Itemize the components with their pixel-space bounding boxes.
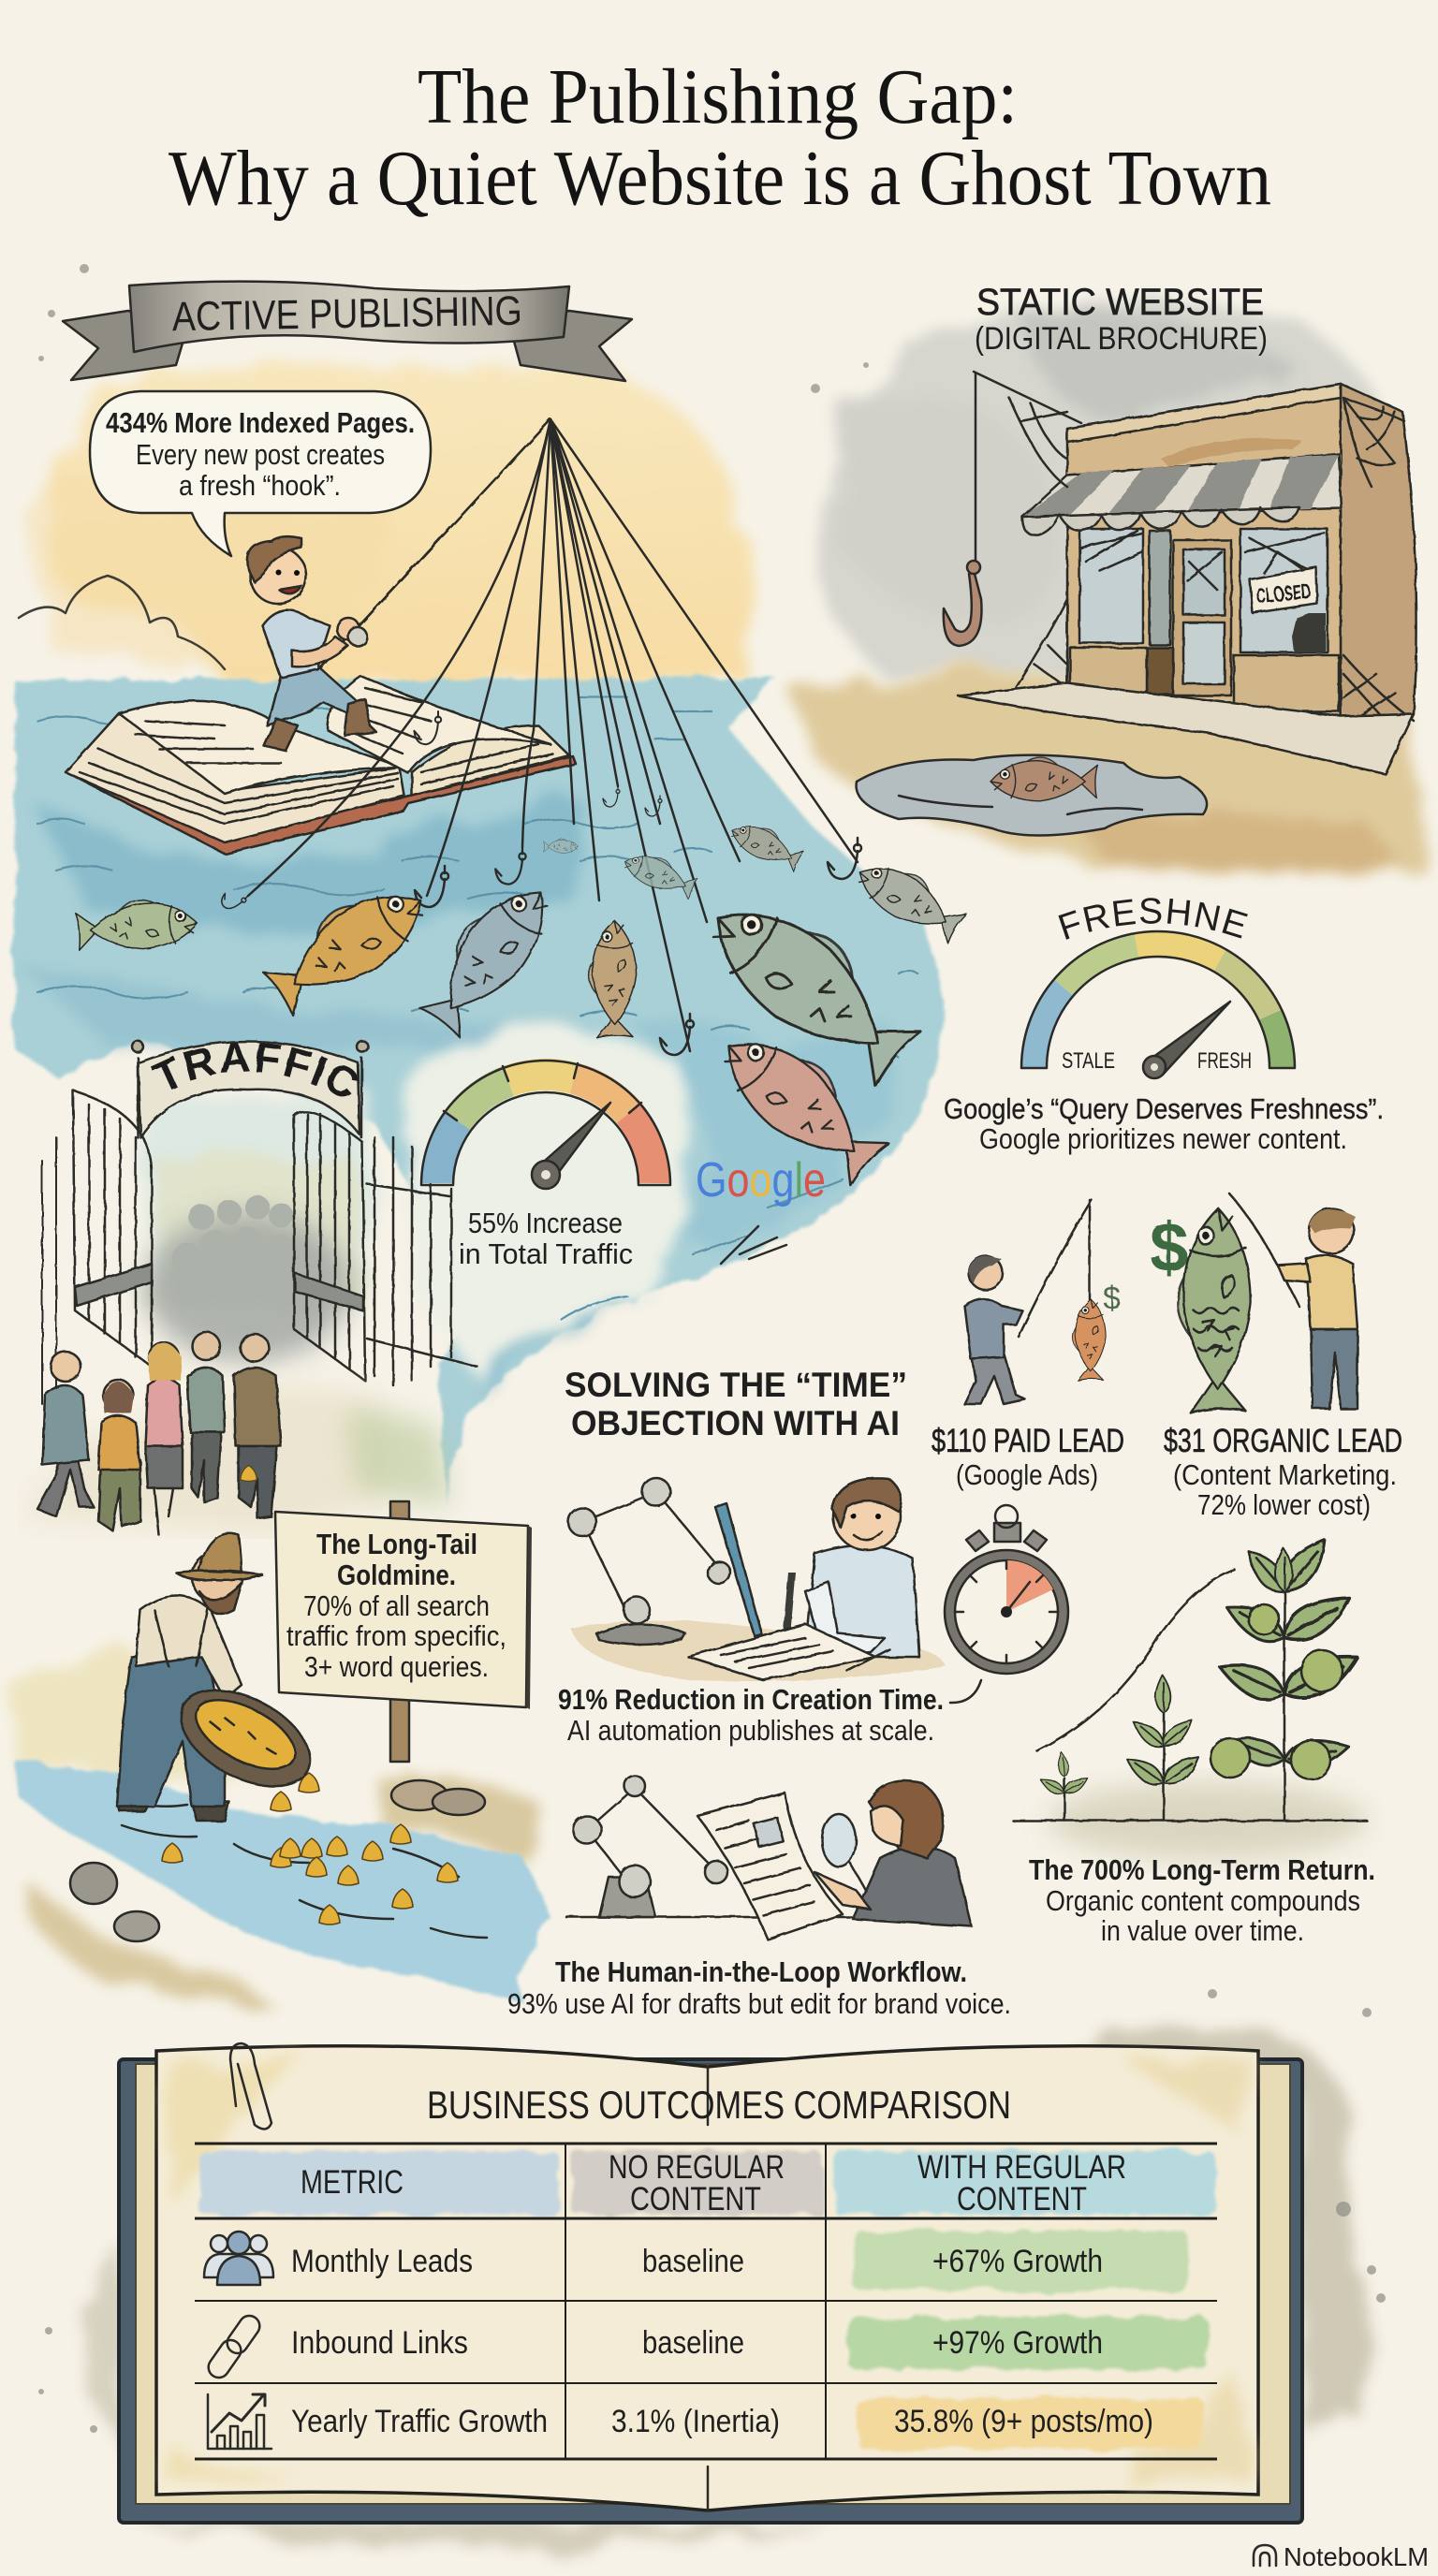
book pages bbox=[156, 2046, 1258, 2510]
icon: growth chart bbox=[208, 2394, 271, 2449]
static website heading: (DIGITAL BROCHURE) bbox=[975, 321, 1268, 357]
text: paid lead: (Google Ads) bbox=[956, 1458, 1098, 1491]
text: query deserves freshness bbox=[944, 1092, 1384, 1155]
google logo bbox=[696, 1153, 826, 1264]
stains behind comparison book bbox=[87, 2028, 1376, 2546]
icon: robot arm and human editor bbox=[566, 1776, 972, 1939]
static website heading bbox=[975, 282, 1268, 357]
text: long-term return: Organic content compounds bbox=[1046, 1884, 1360, 1917]
splatter dots bbox=[38, 264, 1386, 2433]
awning bbox=[1022, 454, 1342, 535]
header washes bbox=[198, 2151, 1215, 2449]
page aging stains bbox=[169, 2059, 1255, 2485]
table title: BUSINESS OUTCOMES COMPARISON bbox=[427, 2083, 1011, 2127]
rocks on bank bbox=[70, 1780, 485, 1941]
hooks on lines bbox=[218, 711, 861, 1055]
banner: active publishing: ACTIVE PUBLISHING bbox=[171, 288, 522, 340]
text: creation time: AI automation publishes at scale. bbox=[567, 1714, 934, 1747]
banner: active publishing bbox=[63, 282, 632, 381]
icon: organic lead fisher and big fish bbox=[1150, 1193, 1357, 1412]
cobwebs bbox=[1009, 398, 1414, 721]
book cover bbox=[119, 2059, 1302, 2523]
sign: long-tail goldmine: traffic from specific, bbox=[286, 1619, 506, 1652]
sign: long-tail goldmine: The Long-Tail bbox=[316, 1528, 477, 1560]
row: monthly leads: +67% Growth bbox=[932, 2244, 1103, 2279]
gauge: freshness: FRESH bbox=[1197, 1048, 1252, 1074]
row: inbound links: baseline bbox=[642, 2325, 744, 2361]
text: human in the loop: The Human-in-the-Loop Workflow. bbox=[555, 1955, 967, 1988]
grey storm wash behind static website bbox=[820, 300, 1409, 674]
static website heading: STATIC WEBSITE bbox=[976, 282, 1264, 323]
gauge: freshness: STALE bbox=[1062, 1048, 1115, 1074]
water lights and shadows bbox=[19, 796, 899, 1395]
gauge: traffic bbox=[421, 1061, 670, 1270]
arrow: reduction to stopwatch bbox=[950, 1680, 981, 1703]
callout: indexed pages: 434% More Indexed Pages. bbox=[106, 406, 415, 439]
sign: long-tail goldmine: 3+ word queries. bbox=[304, 1650, 489, 1683]
title bbox=[169, 53, 1271, 222]
text: organic lead bbox=[1164, 1423, 1402, 1521]
fish catch bbox=[75, 815, 970, 1191]
gauge: traffic: in Total Traffic bbox=[459, 1237, 633, 1270]
man fishing bbox=[247, 419, 550, 751]
heading: solving the time objection bbox=[565, 1366, 907, 1442]
table rules bbox=[195, 2144, 1217, 2459]
row: monthly leads bbox=[204, 2232, 1103, 2285]
sign: closed: CLOSED bbox=[1255, 578, 1312, 608]
gold pan bbox=[165, 1671, 326, 1806]
storefront building bbox=[1067, 384, 1416, 716]
icon: stranded fish in puddle bbox=[857, 755, 1207, 835]
table header: CONTENT bbox=[630, 2181, 761, 2217]
growth washes bbox=[852, 2231, 1189, 2291]
row: monthly leads: baseline bbox=[642, 2244, 744, 2279]
text: query deserves freshness: Google prioritizes newer content. bbox=[979, 1122, 1347, 1155]
sign: long-tail goldmine: 70% of all search bbox=[303, 1589, 490, 1622]
icon: organic lead fisher and big fish: $ bbox=[1150, 1208, 1188, 1286]
text: human in the loop: 93% use AI for drafts but edit for brand voice. bbox=[507, 1987, 1011, 2020]
comparison table: open book bbox=[119, 2043, 1302, 2523]
needle bbox=[532, 1103, 610, 1189]
pale clearing behind gauge and gate bbox=[140, 1027, 692, 1376]
ripples bbox=[37, 697, 917, 1320]
sign: long-tail goldmine bbox=[275, 1501, 532, 1762]
table header: NO REGULAR bbox=[609, 2149, 785, 2186]
table header bbox=[301, 2149, 1126, 2217]
page stack bbox=[136, 2064, 1290, 2504]
sandy ground bbox=[786, 669, 1428, 876]
left gate leaf bbox=[42, 1090, 152, 1404]
table header: CONTENT bbox=[957, 2181, 1087, 2217]
callout: indexed pages: a fresh “hook”. bbox=[179, 469, 341, 502]
notebooklm logo: NotebookLM bbox=[1284, 2542, 1429, 2571]
title: Why a Quiet Website is a Ghost Town bbox=[169, 135, 1271, 222]
text: query deserves freshness: Google’s “Query Deserves Freshness”. bbox=[944, 1092, 1384, 1125]
icon: chain bbox=[204, 2312, 264, 2381]
sky wash bbox=[28, 360, 749, 688]
fishing lines from rod tip bbox=[248, 419, 858, 1051]
water: sea and river bbox=[14, 679, 944, 1507]
paperclip bbox=[230, 2043, 271, 2130]
row: inbound links bbox=[204, 2312, 1103, 2381]
text: creation time: 91% Reduction in Creation Time. bbox=[558, 1683, 944, 1716]
heading: solving the time objection: OBJECTION WITH AI bbox=[571, 1404, 900, 1442]
book raft bbox=[66, 676, 576, 854]
row: yearly traffic growth: 3.1% (Inertia) bbox=[611, 2404, 780, 2439]
prospector panning for gold bbox=[117, 1533, 326, 1821]
icon: growing plants and growth curve bbox=[1013, 1532, 1367, 1858]
text: creation time bbox=[558, 1683, 944, 1747]
icon: stopwatch bbox=[945, 1505, 1068, 1674]
icon: paid lead fisher: $ bbox=[1103, 1281, 1121, 1316]
text: long-term return: The 700% Long-Term Return. bbox=[1029, 1853, 1375, 1886]
right gate leaf bbox=[294, 1111, 477, 1385]
text: human in the loop bbox=[507, 1955, 1011, 2020]
row: yearly traffic growth: 35.8% (9+ posts/mo) bbox=[894, 2404, 1153, 2439]
callout: indexed pages bbox=[90, 391, 431, 556]
row: inbound links: Inbound Links bbox=[291, 2325, 468, 2361]
row: monthly leads: Monthly Leads bbox=[291, 2244, 473, 2279]
crowd silhouettes bbox=[145, 1195, 351, 1362]
gauge: freshness bbox=[440, 898, 1296, 1116]
table header: WITH REGULAR bbox=[917, 2149, 1126, 2186]
row: yearly traffic growth: Yearly Traffic Growth bbox=[291, 2404, 548, 2439]
stream with gold bbox=[14, 1466, 552, 2012]
pavement bbox=[958, 683, 1414, 774]
icon: abandoned storefront bbox=[958, 384, 1416, 774]
text: long-term return: in value over time. bbox=[1101, 1914, 1304, 1947]
arch sign bbox=[131, 1039, 370, 1139]
callout: indexed pages: Every new post creates bbox=[136, 438, 385, 471]
text: paid lead bbox=[932, 1423, 1124, 1491]
sign: long-tail goldmine: Goldmine. bbox=[337, 1559, 456, 1591]
icon: robot arm with writer bbox=[568, 1478, 946, 1681]
text: organic lead: 72% lower cost) bbox=[1197, 1488, 1371, 1521]
title: The Publishing Gap: bbox=[418, 53, 1018, 140]
icon: people bbox=[204, 2232, 273, 2285]
table header: METRIC bbox=[301, 2164, 404, 2201]
cloud outline bbox=[19, 576, 225, 669]
sign: closed bbox=[1250, 552, 1317, 613]
row: inbound links: +97% Growth bbox=[932, 2325, 1103, 2361]
text: paid lead: $110 PAID LEAD bbox=[932, 1423, 1124, 1459]
row: yearly traffic growth bbox=[208, 2394, 1153, 2449]
gold nuggets in water bbox=[162, 1466, 458, 1925]
text: organic lead: (Content Marketing. bbox=[1173, 1458, 1397, 1491]
heading: solving the time objection: SOLVING THE “TIME” bbox=[565, 1366, 907, 1404]
icon: empty hook on pole bbox=[944, 372, 1081, 646]
traffic gate bbox=[41, 1039, 478, 1405]
google logo: Google bbox=[696, 1153, 826, 1208]
visitors walking through gate bbox=[19, 1332, 449, 1535]
gauge: traffic: 55% Increase bbox=[468, 1207, 623, 1239]
text: long-term return bbox=[1029, 1853, 1375, 1947]
arch sign: TRAFFIC bbox=[151, 1043, 358, 1097]
icon: paid lead fisher bbox=[964, 1200, 1121, 1404]
